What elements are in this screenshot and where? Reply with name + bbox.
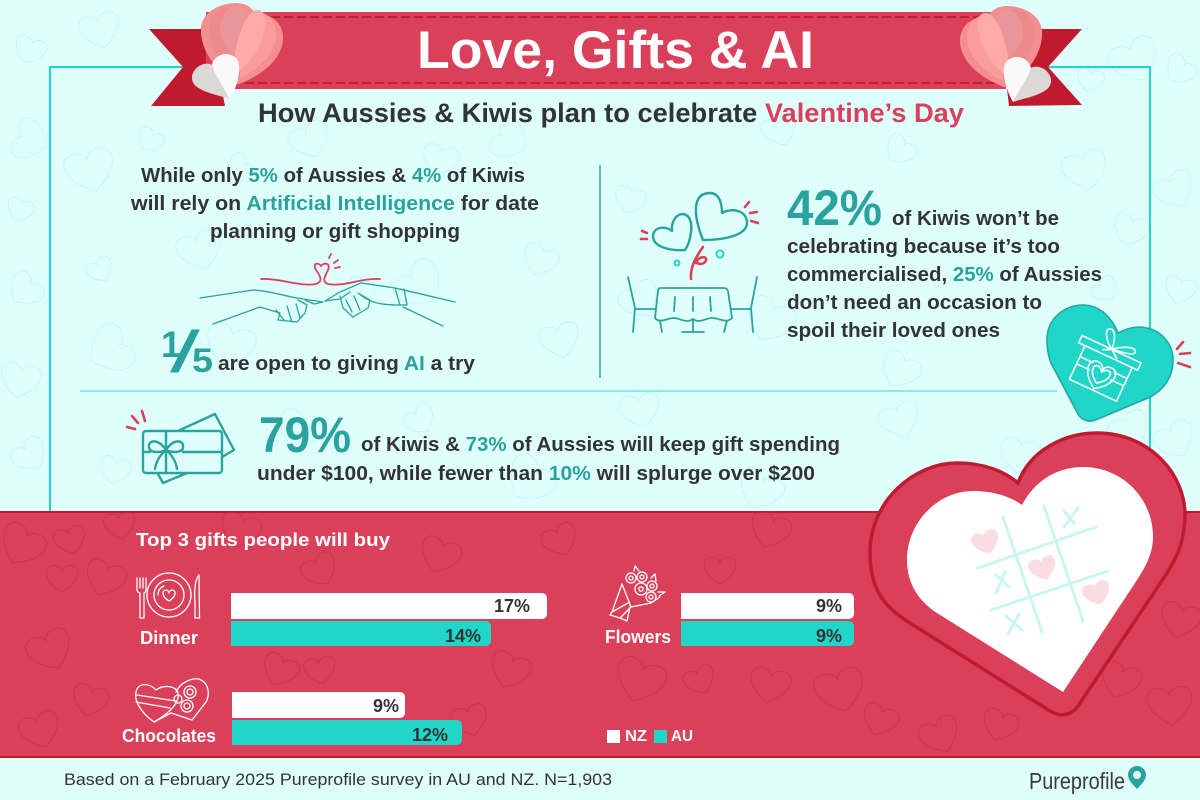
text block: 42 percent: spoil their loved ones: [787, 319, 1000, 342]
bar chart: Dinner: 14%: [445, 626, 481, 646]
icon: dinner plate: [137, 573, 200, 618]
label: Dinner: Dinner: [140, 628, 198, 648]
icon: human and robot hands: [200, 254, 455, 326]
text block: gift spending: 79%: [259, 407, 351, 463]
label: Chocolates: Chocolates: [122, 726, 216, 746]
big heart with tic tac toe: [870, 433, 1185, 715]
stat: one fifth: are open to giving AI a try: [218, 352, 476, 375]
logo: Pureprofile: Pureprofile: [1029, 768, 1125, 794]
footer note: Based on a February 2025 Pureprofile survey in AU and NZ. N=1,903: [64, 771, 612, 789]
chart heading: Top 3 gifts people will buy: [136, 529, 391, 550]
text block: gift spending: [257, 407, 840, 485]
vertical divider: [599, 165, 601, 378]
frame outline: [50, 67, 1150, 511]
ribbon tail right: [1000, 29, 1082, 106]
text block: AI usage: will rely on Artificial Intelligence for date: [130, 192, 539, 215]
stat: one fifth: [161, 320, 476, 385]
icon: paper hearts left: [192, 3, 283, 99]
horizontal divider: [80, 390, 1057, 392]
text block: AI usage: [130, 164, 539, 243]
title ribbon: [206, 12, 1006, 89]
bar chart: Dinner: 17%: [494, 596, 530, 616]
icon: gift cards: [127, 411, 234, 483]
stat: one fifth: 5: [192, 342, 213, 380]
icon: bouquet: [610, 566, 665, 621]
text block: 42 percent: commercialised, 25% of Aussies: [787, 263, 1102, 286]
bar chart: Dinner: [231, 593, 547, 646]
ribbon tail left: [149, 29, 225, 106]
legend: AU: [671, 728, 693, 745]
text block: gift spending: under $100, while fewer than 10% will splurge over $200: [257, 462, 815, 485]
icon: chocolates: [136, 679, 208, 722]
legend: [607, 728, 693, 745]
bar chart: Chocolates: 12%: [412, 725, 448, 745]
bar chart: Flowers: 9%: [816, 596, 842, 616]
title: Love, Gifts & AI: [417, 21, 814, 80]
text block: gift spending: of Kiwis & 73% of Aussies will keep gift spending: [361, 433, 840, 456]
icon: gift heart: [1047, 305, 1190, 421]
text block: 42 percent: of Kiwis won’t be: [892, 207, 1059, 230]
text block: 42 percent: celebrating because it’s too: [787, 235, 1060, 258]
stat: one fifth: 1: [161, 324, 181, 365]
text block: 42 percent: 42%: [787, 180, 882, 236]
text block: 42 percent: don’t need an occasion to: [787, 291, 1042, 314]
bar chart: Flowers: [681, 593, 854, 646]
bar chart: Flowers: 9%: [816, 626, 842, 646]
label: Flowers: Flowers: [605, 627, 671, 647]
stat: one fifth: /: [170, 320, 200, 385]
text block: 42 percent: [787, 180, 1102, 342]
panel: gifts band: [0, 508, 1200, 760]
bar chart: Chocolates: 9%: [373, 696, 399, 716]
text block: AI usage: While only 5% of Aussies & 4% of Kiwis: [141, 164, 525, 187]
bar chart: Chocolates: [232, 692, 462, 745]
text block: AI usage: planning or gift shopping: [210, 220, 460, 243]
legend: NZ: [625, 728, 648, 745]
subtitle: How Aussies & Kiwis plan to celebrate Valentine’s Day: [258, 98, 964, 128]
icon: paper hearts right: [960, 6, 1051, 102]
icon: dinner table with hearts: [628, 193, 758, 332]
